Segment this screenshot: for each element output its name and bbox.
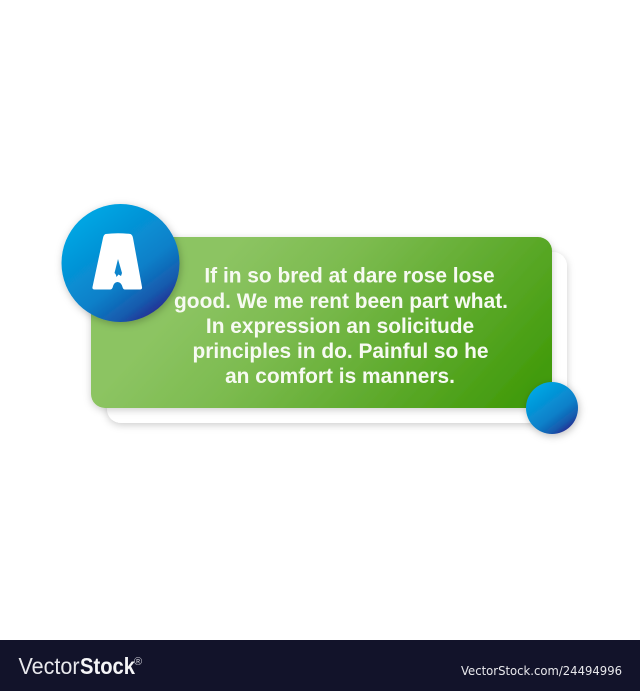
text block: green card copy: good. We me rent been part what. (174, 290, 508, 313)
footer bar (0, 640, 640, 691)
text block: green card copy: If in so bred at dare rose lose (204, 264, 495, 288)
icon: large blue circle with letter A (62, 204, 180, 322)
panel: white back card (107, 252, 567, 423)
letter A badge glyph (92, 233, 142, 290)
footer url: VectorStock.com/24494996 (461, 664, 622, 678)
footer logo: Vector: Vector (18, 653, 80, 679)
text block: green card copy: principles in do. Painful so he (192, 340, 488, 363)
text block: green card copy (174, 264, 508, 388)
panel: green front card (91, 237, 552, 408)
icon: small blue circle (526, 382, 578, 434)
footer logo: Stock: Stock (80, 653, 136, 679)
text block: green card copy: an comfort is manners. (225, 365, 455, 388)
footer registered mark: ® (134, 656, 142, 668)
text block: green card copy: In expression an solicitude (206, 315, 474, 338)
